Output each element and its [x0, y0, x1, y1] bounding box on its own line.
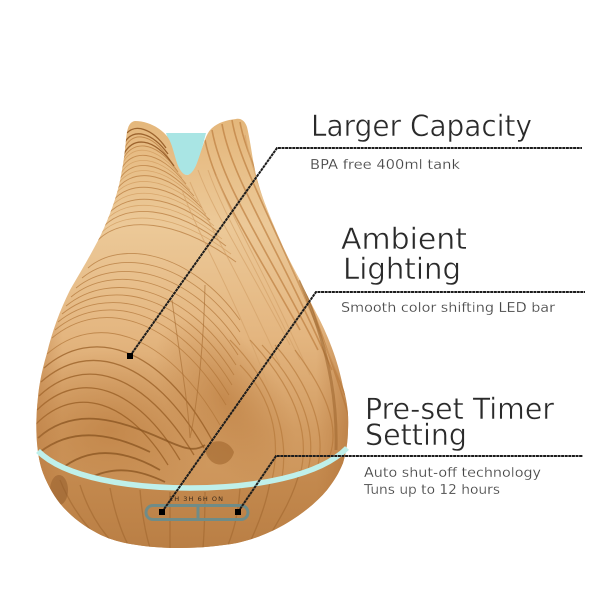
- side shading: [36, 325, 348, 484]
- grain: base: [60, 470, 300, 548]
- grain: top left lobe rings: [98, 137, 236, 262]
- description: BPA free 400ml tank: [310, 158, 461, 173]
- heading line one: Ambient: [341, 222, 467, 256]
- soft dark tones: [36, 368, 182, 474]
- marker: [127, 353, 133, 359]
- callout: larger capacity: [127, 109, 582, 359]
- knot near the band: [205, 441, 234, 464]
- description line two: Tuns up to 12 hours: [363, 483, 500, 498]
- LED light band: [38, 448, 347, 488]
- heading line one: Pre-set Timer: [365, 392, 554, 426]
- leader line: [238, 456, 583, 512]
- diffuser illustration: [36, 118, 349, 548]
- timer labels: 1H 3H 6H ON: [169, 495, 223, 503]
- darker base below the light band: [38, 454, 346, 548]
- heading: Larger Capacity: [311, 109, 532, 143]
- teal water tank: [166, 133, 206, 175]
- control panel: [146, 495, 248, 520]
- description line one: Auto shut-off technology: [364, 466, 541, 481]
- marker: [159, 509, 165, 515]
- leader line: [130, 148, 582, 356]
- callout: ambient lighting: [159, 222, 585, 515]
- callout: pre-set timer: [235, 392, 583, 515]
- heading line two: Setting: [365, 418, 467, 452]
- grain: upper right strokes: [205, 120, 350, 420]
- grain: lower ring knot: [38, 419, 205, 482]
- wooden body: [36, 118, 348, 548]
- marker: [235, 509, 241, 515]
- heading line two: Lighting: [343, 252, 461, 286]
- grain: middle rings: [47, 253, 240, 425]
- grain: right lower strokes: [230, 340, 333, 480]
- leader line: [162, 292, 585, 512]
- description: Smooth color shifting LED bar: [341, 301, 556, 316]
